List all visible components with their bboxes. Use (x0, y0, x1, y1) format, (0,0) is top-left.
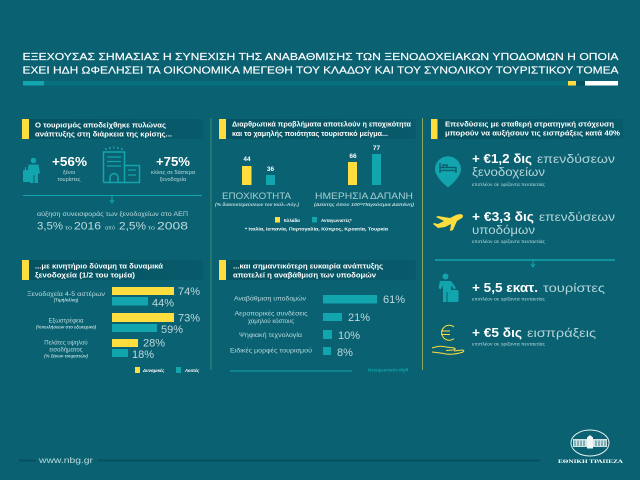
category: 4-5 star hotels: (Τιμή/κλίνη) (54, 298, 79, 302)
logo: national bank of greece: ΕΘΝΙΚΗ ΤΡΑΠΕΖΑ (558, 459, 623, 465)
category: high income guests (44, 338, 165, 361)
category: high income guests: Πελάτες υψηλού (44, 340, 88, 346)
heading: investments: μπορούν να αυξήσουν τις εισπράξεις κατά 40% (445, 128, 620, 138)
row: special tourism forms: 8% (337, 347, 353, 359)
text: GDP contribution: 2016 (74, 220, 101, 232)
outcome: tourists (472, 281, 605, 302)
stat: 5-star beds: ξενοδοχεία (160, 177, 187, 183)
bar chart: daily spending: ΗΜΕΡΗΣΙΑ ΔΑΠΑΝΗ (315, 191, 413, 201)
category: 4-5 star hotels: 74% (178, 286, 200, 298)
panel: upgrade opportunity (219, 260, 416, 372)
investment: infrastructure (472, 210, 615, 244)
investment: hotels: επιπλέον σε ορίζοντα πενταετίας (472, 182, 545, 187)
title: ΕΧΕΙ ΗΔΗ ΩΦΕΛΗΣΕΙ ΤΑ ΟΙΚΟΝΟΜΙΚΑ ΜΕΓΕΘΗ ΤΟΥ ΚΛΑΔΟΥ ΚΑΙ ΤΟΥ ΣΥΝΟΛΙΚΟΥ ΤΟΥΡΙΣΤΙΚΟΥ ΤΟΜΕΑ (22, 64, 618, 76)
icon: airplane (433, 214, 463, 231)
website: www.nbg.gr (38, 456, 93, 465)
icon: tourist with suitcase (438, 274, 458, 302)
bar chart: seasonality: (% διανυκτερεύσεων τον Ιούλ.-Αύγ.) (215, 202, 300, 207)
icon: hotel bed pin (435, 156, 461, 188)
panel: dynamic hotels (22, 260, 203, 373)
heading: dynamic hotels: ξενοδοχεία (1/2 του τομέα) (35, 270, 136, 280)
category: high income guests: εισοδήματος (49, 346, 83, 354)
text: GDP contribution: το (65, 226, 72, 232)
text: GDP contribution: 2008 (157, 220, 188, 232)
heading: upgrade opportunity: αποτελεί η αναβάθμιση των υποδομών (233, 270, 376, 280)
legend: Λοιπές (184, 368, 200, 373)
arrow: down to outcomes (435, 260, 615, 267)
outcome: receipts: εισπράξεις (527, 326, 596, 340)
category: exports: 73% (178, 312, 200, 324)
heading: upgrade opportunity (219, 260, 416, 280)
outcome: receipts: + €5 δις (472, 326, 522, 340)
icon: euro in hand (432, 325, 464, 354)
category: exports: Εξωστρέφεια (49, 318, 84, 324)
stat: foreign tourists: τουρίστες (57, 177, 81, 183)
arrow: down to GDP contribution (23, 196, 202, 203)
row: low cost air links (234, 310, 370, 325)
row: special tourism forms (230, 347, 353, 359)
panel: tourism pillar (22, 119, 203, 232)
investment: infrastructure: + €3,3 δις (472, 210, 534, 224)
investment: hotels: + €1,2 δις (472, 152, 532, 166)
text: GDP contribution: αύξηση συνεισφοράς των ξενοδοχείων στο ΑΕΠ (37, 211, 188, 218)
legend (135, 367, 200, 373)
heading: investments (431, 119, 623, 139)
heading: structural problems: Διαρθρωτικά προβλήματα αποτελούν η εποχικότητα (232, 120, 411, 128)
investment: infrastructure: επιπλέον σε ορίζοντα πενταετίας (472, 239, 545, 244)
panel: investments (431, 119, 623, 354)
legend and footnote: * Ιταλία, Ισπανία, Πορτογαλία, Κύπρος, Κροατία, Τουρκία (245, 226, 388, 232)
category: exports: 59% (161, 324, 183, 336)
bar chart: seasonality: ΕΠΟΧΙΚΟΤΗΤΑ (222, 191, 291, 201)
investment: hotels: ξενοδοχείων (472, 165, 545, 179)
heading: tourism pillar: Ο τουρισμός αποδείχθηκε πυλώνας (35, 120, 166, 130)
row: infrastructure upgrade: Αναβάθμιση υποδομών (234, 296, 306, 302)
stat: 5-star beds (151, 155, 196, 183)
row: infrastructure upgrade: 61% (383, 294, 405, 306)
legend and footnote: Ελλάδα (284, 218, 300, 223)
row: digital technology (239, 330, 360, 342)
heading: dynamic hotels (22, 260, 203, 280)
row: low cost air links: χαμηλού κόστους (248, 318, 294, 325)
bar chart: daily spending: 66 (349, 153, 357, 160)
category: high income guests: (% ξένων τουριστών) (44, 354, 88, 358)
investment: hotels: επενδύσεων (537, 152, 615, 166)
outcome: receipts (472, 326, 596, 346)
heading: structural problems (219, 119, 416, 139)
category: high income guests: 18% (132, 349, 154, 361)
category: 4-5 star hotels (27, 286, 200, 310)
heading: dynamic hotels: ...με κινητήριο δύναμη τα δυναμικά (35, 262, 163, 270)
category: 4-5 star hotels: Ξενοδοχεία 4-5 αστέρων (27, 291, 105, 298)
category: exports (36, 312, 200, 336)
row: digital technology: Ψηφιακή τεχνολογία (239, 332, 303, 339)
category: high income guests: 28% (143, 338, 165, 350)
bar chart: seasonality: 44 (243, 156, 251, 163)
bar chart: seasonality (215, 156, 300, 207)
heading: investments: Επενδύσεις με σταθερή στρατηγική στόχευση (445, 120, 615, 128)
text: GDP contribution: 2,5% (119, 220, 146, 232)
bar chart: daily spending: (Δείκτης όπου 100=Παγκόσμια Δαπάνη) (314, 202, 415, 207)
stat: foreign tourists: +56% (52, 155, 87, 169)
source note: Ντουρεστικόν Myθ (368, 368, 409, 372)
text: GDP contribution: από (105, 224, 115, 232)
row: digital technology: 10% (338, 330, 360, 342)
stat: foreign tourists: ξένοι (63, 169, 76, 176)
outcome: tourists: + 5,5 εκατ. (472, 281, 538, 295)
row: special tourism forms: Ειδικές μορφές τουρισμού (230, 348, 312, 354)
heading: tourism pillar (22, 119, 203, 139)
text: GDP contribution: 3,5% (37, 220, 63, 232)
text: GDP contribution: το (148, 226, 155, 232)
legend: Δυναμικές (142, 368, 165, 373)
bar chart: daily spending (314, 145, 415, 207)
title: ΕΞΕΧΟΥΣΑΣ ΣΗΜΑΣΙΑΣ Η ΣΥΝΕΧΙΣΗ ΤΗΣ ΑΝΑΒΑΘΜΙΣΗΣ ΤΩΝ ΞΕΝΟΔΟΧΕΙΑΚΩΝ ΥΠΟΔΟΜΩΝ Η ΟΠΟΙΑ (22, 51, 618, 63)
stat: 5-star beds: κλίνες σε 5άστερα (151, 169, 196, 176)
legend and footnote: Ανταγωνιστές* (321, 218, 352, 223)
icon: hotel (104, 148, 140, 182)
row: low cost air links: 21% (348, 312, 370, 324)
legend and footnote (245, 217, 388, 232)
panel: structural problems (215, 119, 416, 232)
investment: hotels (472, 152, 615, 187)
investment: infrastructure: επενδύσεων (539, 210, 615, 224)
investment: infrastructure: υποδόμων (472, 223, 535, 237)
bar chart: dynamic vs other hotels (27, 286, 200, 361)
logo: national bank of greece (558, 430, 623, 465)
stat: foreign tourists (52, 155, 87, 183)
stat: 5-star beds: +75% (156, 155, 190, 169)
title rule bar (23, 81, 618, 86)
title (22, 51, 618, 76)
heading: tourism pillar: ανάπτυξης στη διάρκεια της κρίσης... (35, 130, 172, 138)
outcome: tourists: επιπλέον σε ορίζοντα πενταετίας (472, 296, 545, 302)
heading: upgrade opportunity: ...και σημαντικότερη ευκαιρία ανάπτυξης (233, 262, 383, 270)
row: low cost air links: Αεροπορικές συνδέσεις (234, 310, 308, 318)
text: GDP contribution (37, 211, 188, 232)
category: 4-5 star hotels: 44% (152, 298, 174, 310)
category: exports: (%πωλήσεων στο εξωτερικό) (36, 324, 97, 330)
bar chart: daily spending: 77 (373, 145, 380, 152)
outcome: tourists: τουρίστες (543, 281, 605, 295)
heading: structural problems: και το χαμηλής ποιότητας τουριστικό μείγμα... (232, 129, 388, 138)
icon: tourist with suitcase (23, 158, 40, 183)
footer (19, 430, 623, 465)
bar chart: development opportunities (230, 294, 405, 359)
bar chart: seasonality: 36 (267, 166, 274, 173)
outcome: receipts: επιπλέον σε ορίζοντα πενταετίας (472, 342, 545, 346)
row: infrastructure upgrade (234, 294, 405, 306)
